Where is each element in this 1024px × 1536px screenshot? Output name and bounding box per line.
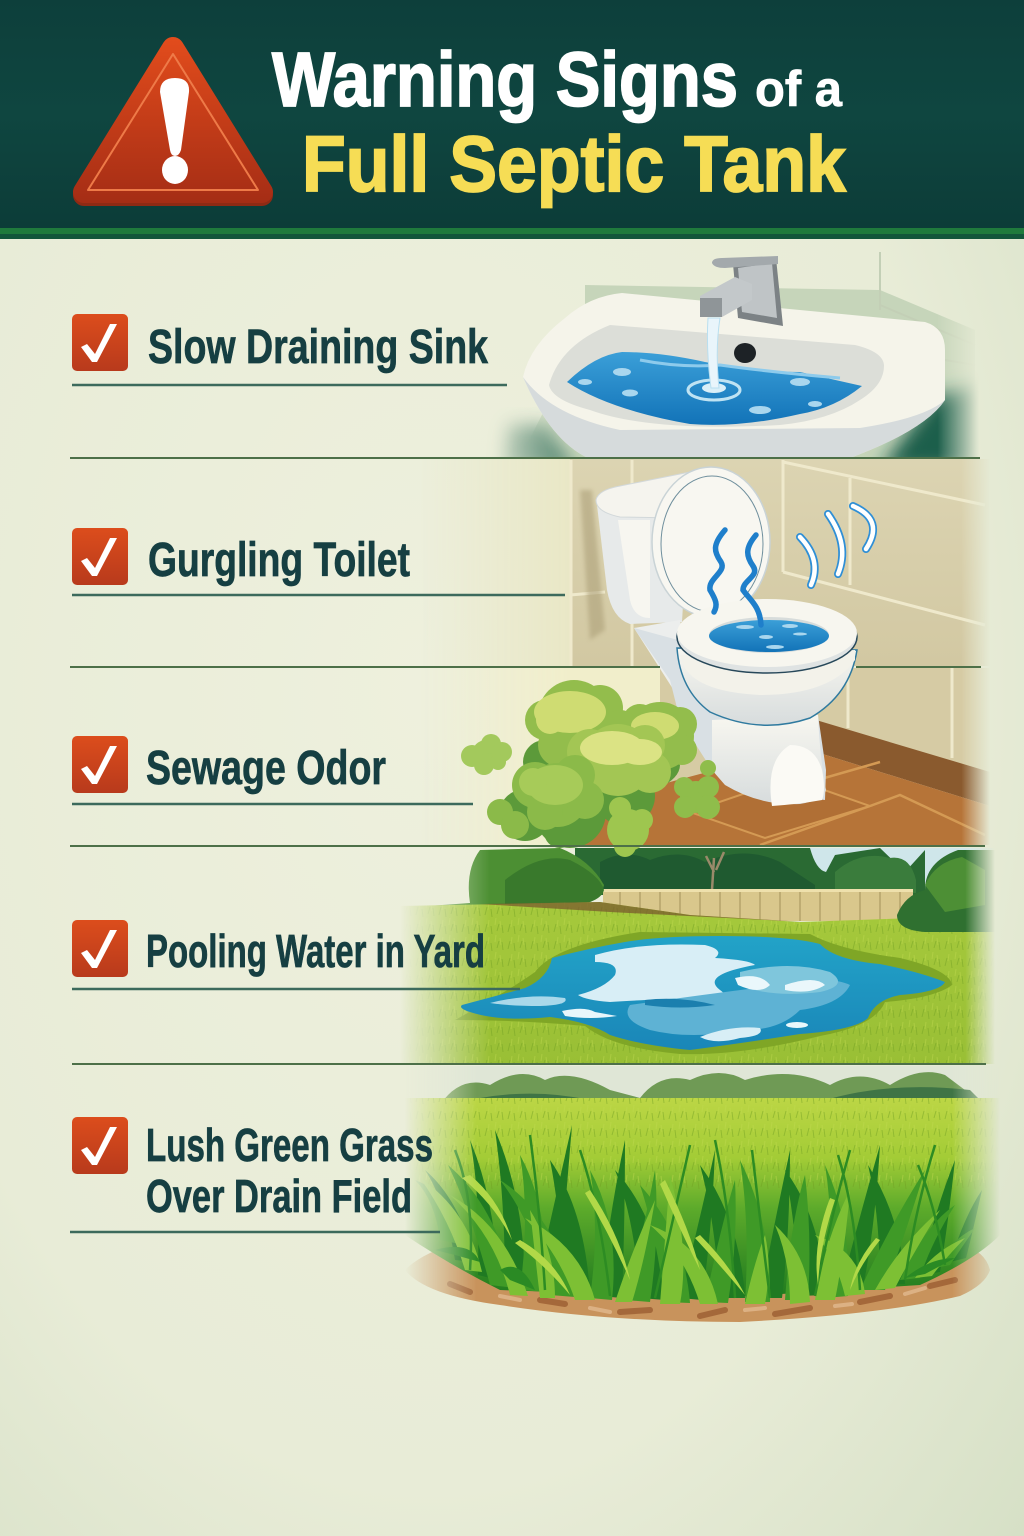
item: sewage odor bbox=[72, 736, 473, 804]
title: Full Septic Tank bbox=[302, 119, 847, 208]
title: of a bbox=[755, 61, 843, 117]
puddle bbox=[461, 936, 945, 1050]
item: lush green grass over drain field: Over Drain Field bbox=[146, 1170, 412, 1222]
icon: checkbox bbox=[72, 314, 128, 371]
bottom puff bbox=[607, 797, 653, 857]
lower left lobes bbox=[487, 755, 604, 839]
cloud shadow mass bbox=[499, 733, 680, 848]
icon: blue gurgle squiggles bbox=[710, 530, 761, 625]
icon: sound waves bbox=[800, 506, 873, 585]
icon: checkbox bbox=[72, 528, 128, 585]
item: sewage odor: Sewage Odor bbox=[146, 742, 386, 795]
far left puff bbox=[461, 734, 512, 775]
toilet bbox=[596, 467, 857, 806]
header banner bbox=[0, 0, 1024, 239]
illustration: lush green grass over drain field bbox=[400, 1066, 1000, 1322]
icon: warning triangle bbox=[84, 48, 262, 195]
item: slow draining sink bbox=[72, 314, 507, 385]
right puffs bbox=[674, 760, 720, 819]
item: gurgling toilet bbox=[72, 528, 565, 595]
upper lobes bbox=[525, 680, 697, 770]
item: pooling water in yard: Pooling Water in Yard bbox=[146, 925, 485, 977]
divider lines bbox=[70, 458, 986, 1064]
title bbox=[272, 37, 847, 208]
icon: checkbox bbox=[72, 736, 128, 793]
illustration: gurgling toilet room bbox=[420, 459, 990, 845]
right hedge bbox=[897, 850, 995, 932]
illustration: yard with pooling water bbox=[400, 848, 995, 1064]
illustration: green odor cloud bbox=[461, 680, 720, 857]
illustration: overflowing sink bbox=[500, 252, 985, 470]
item: slow draining sink: Slow Draining Sink bbox=[148, 321, 488, 374]
middle lobe bbox=[567, 724, 671, 796]
item: gurgling toilet: Gurgling Toilet bbox=[148, 534, 410, 587]
icon: checkbox bbox=[72, 920, 128, 977]
grass blades bbox=[415, 1125, 982, 1304]
item: pooling water in yard bbox=[72, 920, 520, 989]
faucet bbox=[700, 256, 783, 326]
icon: checkbox bbox=[72, 1117, 128, 1174]
title: Warning Signs bbox=[272, 37, 738, 123]
item: lush green grass over drain field: Lush Green Grass bbox=[146, 1119, 433, 1171]
item: lush green grass over drain field bbox=[70, 1117, 440, 1232]
